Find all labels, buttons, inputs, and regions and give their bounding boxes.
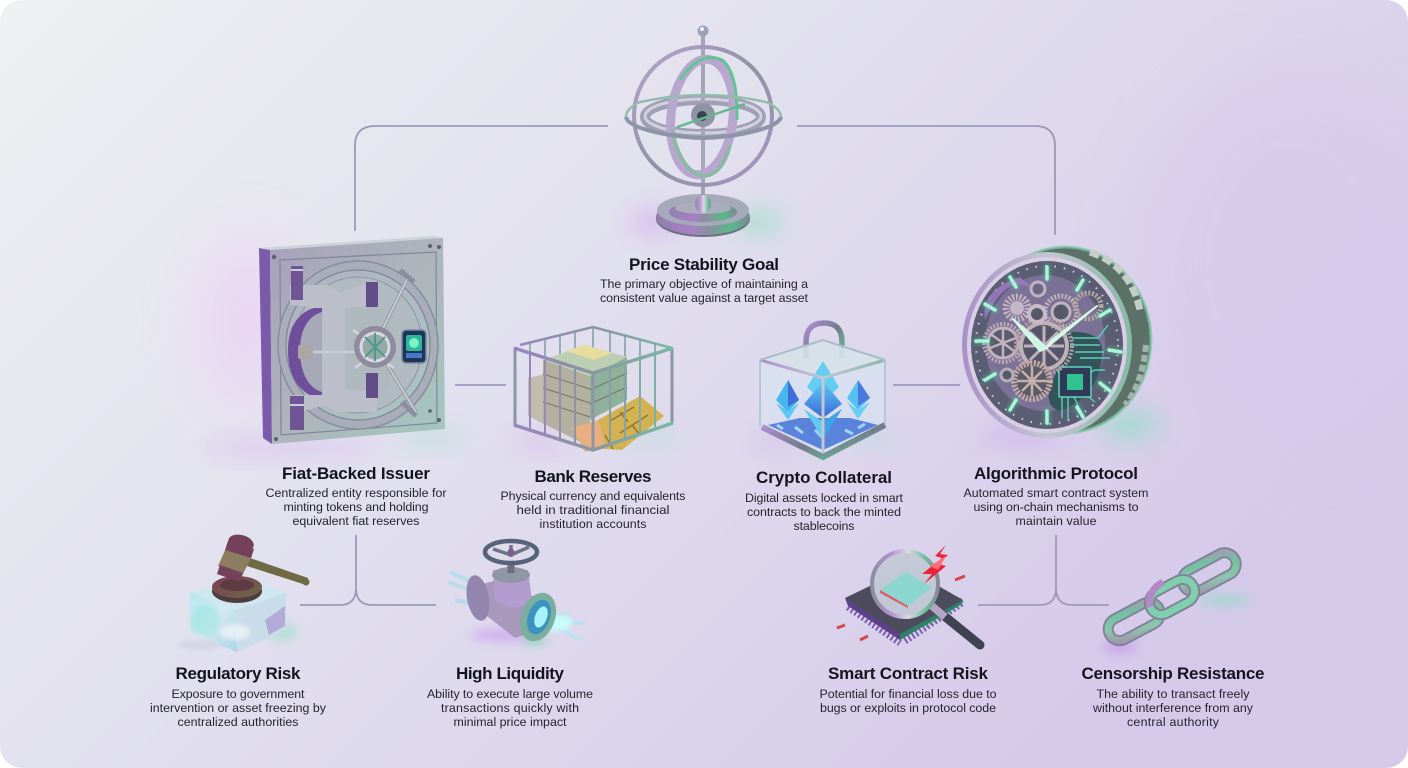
description: Potential for financial loss due to [820,687,997,701]
description [820,687,997,715]
heading: Price Stability Goal [629,255,779,274]
description [150,687,327,729]
description [266,486,446,528]
description: contracts to back the minted [747,505,901,519]
heading: Censorship Resistance [1082,664,1264,683]
icon: chip under magnifying glass [837,545,980,645]
description: stablecoins [794,519,854,533]
icon: gavel on ice block [178,532,310,652]
panel: smart contract risk [820,545,997,715]
icon: mechanical clock with circuit [962,247,1160,444]
description [600,277,809,305]
description: institution accounts [540,517,646,531]
heading: Bank Reserves [534,467,652,486]
heading: Regulatory Risk [176,664,301,683]
heading: Fiat-Backed Issuer [282,464,430,483]
description [745,491,904,533]
description: equivalent fiat reserves [292,514,420,528]
icon: glass lockbox with ethereum gems [755,323,895,457]
connector: issuer to price stability goal [355,126,608,231]
heading: Smart Contract Risk [828,664,989,683]
description [500,489,686,531]
description: Automated smart contract system [964,486,1148,500]
description: Centralized entity responsible for [266,486,446,500]
panel: price stability goal [600,26,809,305]
description: bugs or exploits in protocol code [820,701,996,715]
description [1092,687,1254,729]
panel: regulatory risk [150,532,327,729]
description: consistent value against a target asset [600,291,809,305]
description: minting tokens and holding [284,500,429,514]
description: intervention or asset freezing by [150,701,327,715]
description: Physical currency and equivalents [500,489,686,503]
description: held in traditional financial [516,503,670,517]
panel: high liquidity [427,541,593,729]
description: maintain value [1016,514,1097,528]
description: Ability to execute large volume [427,687,593,701]
connector: protocol to smart contract risk and censorship resistance [978,535,1109,605]
description: centralized authorities [178,715,298,729]
icon: bank vault door [200,236,464,455]
description [964,486,1148,528]
panel: crypto collateral [745,323,904,533]
panel: bank reserves [500,327,686,531]
icon: chain links [1102,549,1251,653]
heading: Algorithmic Protocol [974,464,1138,483]
panel: fiat-backed issuer [200,236,464,528]
description: using on-chain mechanisms to [974,500,1139,514]
description: Digital assets locked in smart [745,491,904,505]
panel: algorithmic protocol [962,247,1160,528]
icon: caged cash and gold [510,327,680,452]
description: The ability to transact freely [1096,687,1250,701]
icon: gyroscope [626,26,784,237]
heading: Crypto Collateral [756,468,892,487]
description: without interference from any [1092,701,1254,715]
description: The primary objective of maintaining a [600,277,808,291]
panel: censorship resistance [1082,549,1264,729]
icon: flowing pipe valve [448,541,585,646]
description: transactions quickly with [441,701,579,715]
connector: issuer to regulatory risk and high liquidity [300,535,436,605]
description: central authority [1127,715,1220,729]
description: Exposure to government [172,687,305,701]
connector: issuer to bank reserves [455,384,506,386]
heading: High Liquidity [456,664,565,683]
description: minimal price impact [454,715,567,729]
connector: crypto collateral to algorithmic protocol [893,384,960,386]
connector: price stability goal to algorithmic protocol [797,126,1055,235]
description [427,687,593,729]
